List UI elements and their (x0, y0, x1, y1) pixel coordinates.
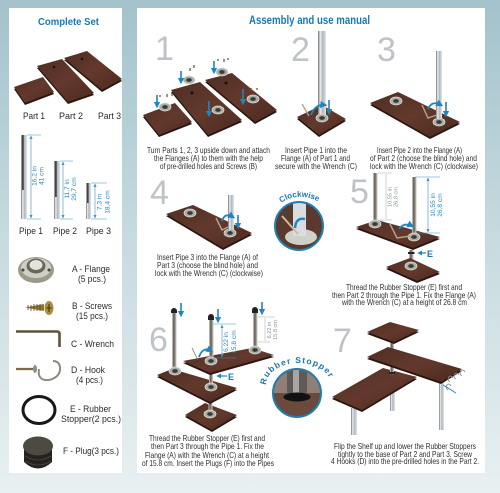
step 7 blue pointer (443, 385, 456, 393)
step number 6: 6 (149, 321, 168, 359)
step 6 caption: of 15.8 cm. Insert the Plugs (F) into the Pipes (142, 458, 274, 468)
step 5 dimension right (415, 177, 444, 233)
step 5 dimension left (378, 173, 400, 220)
step 6 arrows (181, 302, 262, 357)
icon: plug (23, 436, 53, 468)
step 6 dimension front (213, 324, 238, 358)
pipe 1 with dimension (21, 135, 46, 219)
step 5 caption (332, 282, 476, 307)
step 6 dimension back (258, 317, 279, 342)
step 5 assembly (356, 173, 440, 281)
step 3 caption (370, 145, 478, 171)
pipe 1 with dimension: 16,2 in (32, 166, 38, 186)
E marker: E (228, 372, 234, 382)
inset: clockwise (274, 191, 324, 251)
pipe 2 with dimension: 29,7 cm (71, 177, 78, 201)
part labels: Part 3 (98, 110, 121, 121)
icon: screw (25, 301, 54, 315)
step 7 (331, 322, 479, 466)
step 4 board and pipe (166, 195, 252, 248)
step 4 caption: lock with the Wrench (C) (clockwise) (155, 268, 263, 278)
step 1 caption: the Flanges (A) to them with the help (154, 153, 263, 163)
step number 2: 2 (291, 31, 310, 69)
step 2 board and pipe (297, 31, 346, 135)
E marker (218, 372, 234, 382)
heading: assembly manual: Assembly and use manual (249, 15, 370, 27)
step number 1: 1 (155, 30, 174, 68)
step number 3: 3 (377, 31, 396, 69)
step 6 caption: Thread the Rubber Stopper (E) first and (149, 433, 265, 443)
step 1 caption: Turn Parts 1, 2, 3 upside down and attach (147, 145, 270, 155)
panel: assembly and use manual (137, 8, 485, 473)
heading: complete set: Complete Set (38, 16, 99, 28)
step 1 (143, 30, 277, 171)
step 2 caption (275, 145, 357, 171)
icon: flange (18, 257, 54, 283)
label: flange (72, 263, 110, 284)
step 2 arrows (311, 100, 329, 115)
boards: parts 1 2 3 (14, 51, 122, 103)
pipe 3 with dimension: 18,4 cm (104, 190, 112, 214)
step number 4: 4 (150, 174, 169, 212)
clockwise label: Clockwise (279, 191, 319, 202)
step 6 dimension back: 15,8 cm (273, 320, 279, 340)
step 3 board and pipe (370, 51, 460, 137)
label: hook: (4 pcs.) (76, 374, 103, 385)
step 5 caption: with the Wrench (C) at a height of 26.8 cm (341, 297, 467, 307)
step 6 dimension back: 6,22 in (267, 322, 273, 338)
panel: complete set (9, 8, 122, 473)
label: plug: F - Plug(3 pcs.) (63, 445, 119, 456)
step 5 dimension left: 26,8 cm (394, 187, 400, 207)
label: rubber stopper (61, 403, 121, 424)
step 3 (370, 31, 478, 171)
pipe labels (19, 225, 111, 236)
step number 5: 5 (350, 173, 369, 211)
label: hook: D - Hook (71, 364, 105, 375)
step 4 (150, 174, 263, 278)
rubber stopper label: Rubber Stopper (260, 357, 333, 384)
inset: rubber stopper (260, 357, 333, 418)
step 6 caption: then Part 3 through the Pipe 1. Fix the (151, 441, 264, 451)
step 2 caption: secure with the Wrench (C) (275, 161, 357, 171)
pipe 2 with dimension (54, 161, 78, 219)
part labels (23, 110, 121, 121)
step 6 caption (142, 433, 274, 468)
label: screws: B - Screws (72, 300, 112, 311)
E marker (419, 249, 433, 259)
part labels: Part 2 (59, 110, 83, 121)
step 6 (142, 302, 279, 468)
step 5 curved arrow (399, 225, 412, 229)
label: screws: (15 pcs.) (76, 310, 108, 321)
pipe labels: Pipe 3 (86, 225, 111, 236)
step 1 caption: of pre-drilled holes and Screws (B) (160, 161, 257, 171)
step 5 dimension right: 26,8 cm (437, 193, 444, 217)
step 2 (275, 31, 357, 171)
pipe 1 with dimension: 41 cm (38, 167, 46, 185)
step 2 caption: Insert Pipe 1 into the (285, 145, 347, 155)
part labels: Part 1 (23, 110, 45, 121)
step 4 caption (155, 252, 263, 278)
step 3 arrows (428, 102, 446, 115)
clockwise circle detail (275, 200, 323, 250)
icon: rubber stopper (23, 396, 55, 424)
label: screws (72, 300, 112, 321)
step 1 blue arrows (157, 61, 243, 115)
step 6 caption: Flange (A) with the Wrench (C) at a height (145, 450, 269, 460)
label: flange: A - Flange (72, 263, 110, 274)
label: rubber stopper: Stopper(2 pcs.) (61, 413, 121, 424)
step 3 caption: Insert Pipe 2 into the Flange (A) (377, 145, 462, 155)
step 2 caption: Flange (A) of Part 1 and (281, 153, 350, 163)
pipe labels: Pipe 1 (19, 225, 43, 236)
step 6 assembly (157, 307, 274, 430)
step 7 hooks (446, 370, 465, 390)
step 4 caption: Insert Pipe 3 into the Flange (A) of (157, 252, 258, 262)
label: hook (71, 364, 105, 385)
pipe 2 with dimension: 11,7 in (64, 179, 71, 199)
step 1 boards and flanges (143, 58, 277, 135)
step 6 dimension front: 15,8 cm (231, 330, 238, 354)
label: flange: (5 pcs.) (78, 273, 106, 284)
step 5 caption: Thread the Rubber Stopper (E) first and (346, 282, 462, 292)
step number 7: 7 (333, 322, 352, 360)
rubber stopper circle detail (272, 368, 322, 417)
pipe 3 with dimension: 7,3 in (96, 194, 104, 210)
label: wrench: C - Wrench (71, 338, 114, 349)
step 5 dimension right: 10,55 in (430, 193, 437, 217)
E marker: E (427, 249, 433, 259)
step 6 dimension front: 6,22 in (223, 332, 230, 352)
step 5 dimension left: 10,55 in (388, 187, 394, 207)
icon: hook (16, 361, 60, 380)
step 1 caption (147, 145, 270, 171)
pipe labels: Pipe 2 (53, 225, 77, 236)
icon: wrench (16, 332, 60, 347)
step 4 arrows (222, 215, 238, 227)
step 5 (332, 173, 476, 307)
step 4 caption: Part 3 (choose the blind hole) and (157, 260, 258, 270)
pipe 3 with dimension (86, 183, 112, 219)
label: rubber stopper: E - Rubber (70, 403, 111, 414)
step 7 finished shelf (332, 322, 462, 435)
step 7 caption (331, 441, 479, 466)
